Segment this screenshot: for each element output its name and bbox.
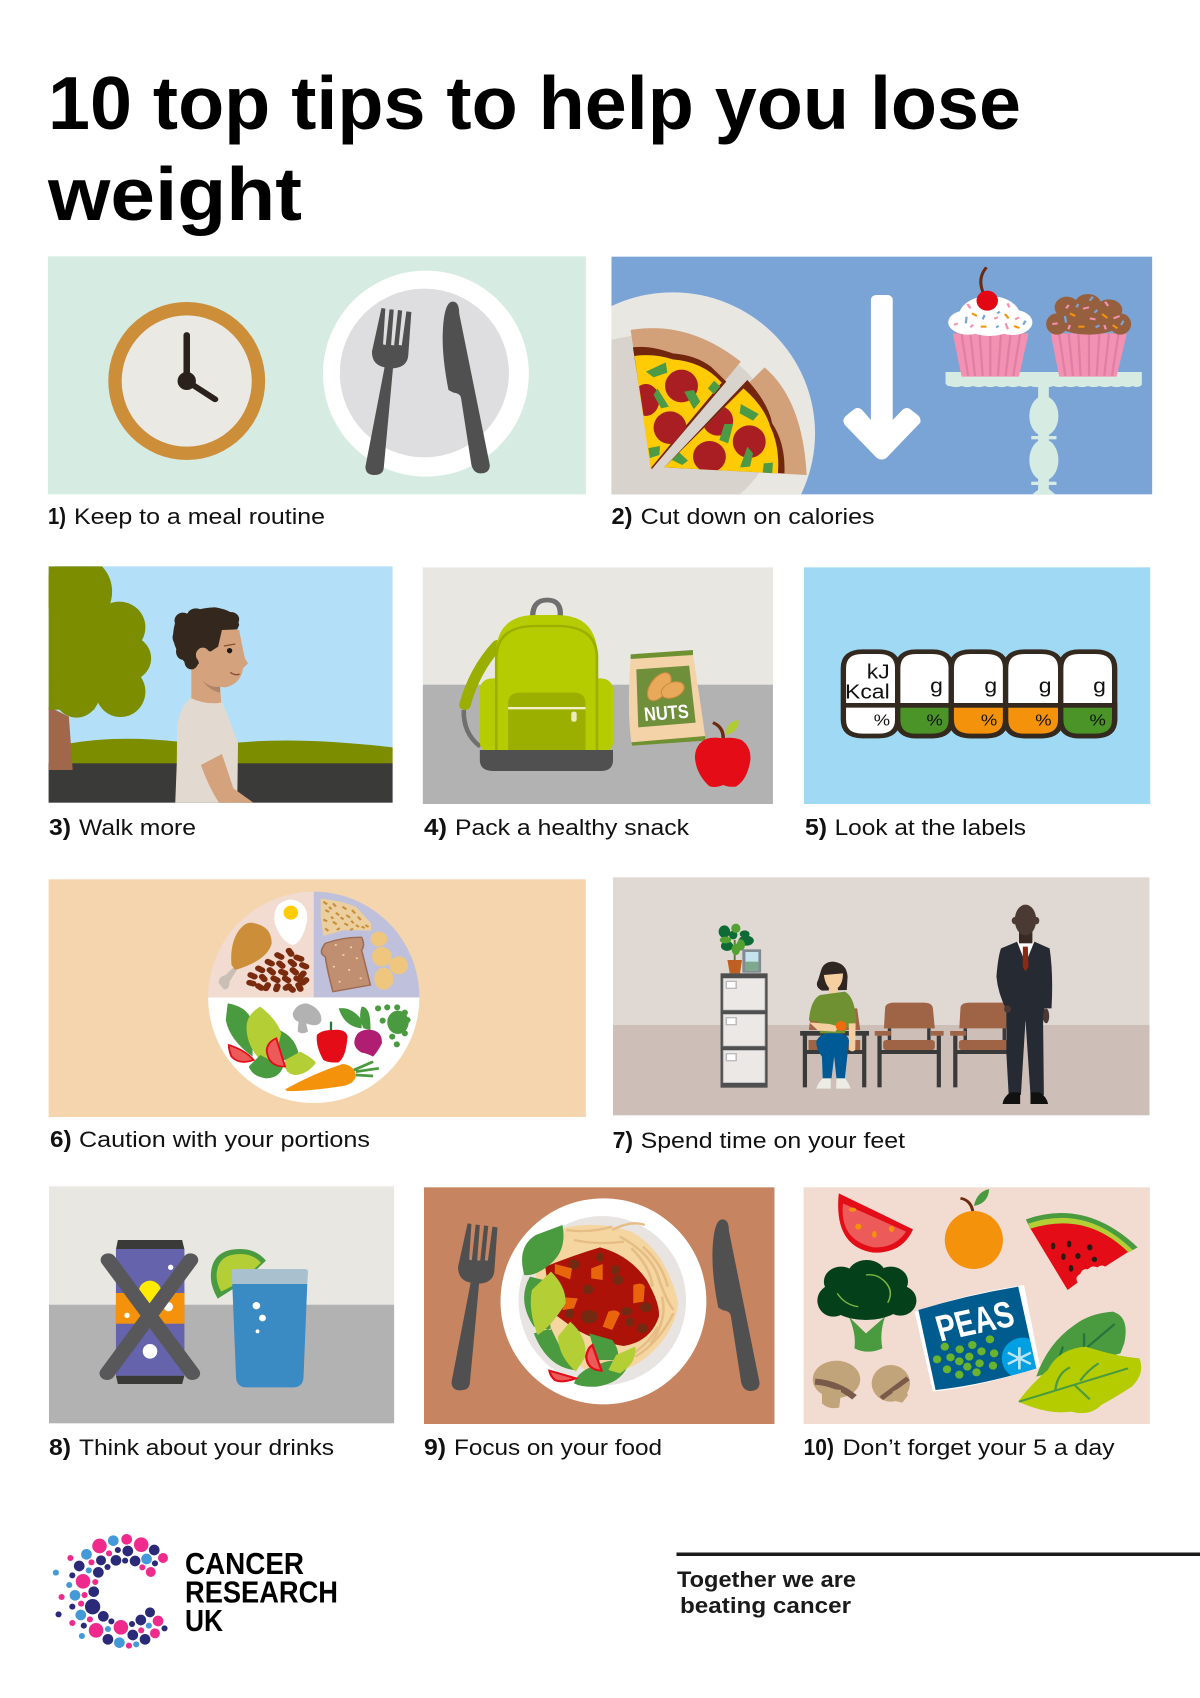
label text: Kcal — [845, 681, 890, 703]
icon: chocolate cupcake — [1046, 294, 1131, 377]
label text: g — [1039, 675, 1052, 697]
title: 10 top tips to help you lose — [48, 61, 1021, 145]
caption 6: 6) — [50, 1126, 72, 1152]
icon: protein foods — [219, 899, 307, 990]
logo mark: dotted C — [53, 1534, 168, 1649]
icon: iced cupcake with cherry — [948, 267, 1032, 377]
caption 10: Don’t forget your 5 a day — [843, 1435, 1115, 1460]
caption 9: Focus on your food — [454, 1435, 662, 1460]
label text: % — [927, 711, 943, 729]
tagline with rule: Together we are — [677, 1567, 856, 1592]
label text: % — [874, 711, 890, 729]
caption 2: Cut down on calories — [641, 504, 875, 529]
chart: plate sections — [208, 892, 419, 1103]
icon: plate with cutlery — [323, 271, 529, 477]
label text: g — [984, 675, 997, 697]
illustration: backpack — [423, 567, 773, 804]
icon: knife — [712, 1219, 760, 1391]
caption 3: 3) — [49, 814, 71, 840]
icon: plate — [501, 1198, 706, 1404]
caption 7: Spend time on your feet — [641, 1128, 905, 1153]
label text: % — [981, 711, 997, 729]
icon: watermelon slice — [1026, 1213, 1138, 1290]
caption 4: 4) — [424, 814, 447, 840]
icon: backpack — [464, 600, 613, 771]
icon: starchy foods — [321, 898, 408, 992]
illustration: waiting room — [613, 877, 1149, 1115]
food: sauce — [545, 1247, 659, 1346]
panel: tip 10 five a day — [804, 1187, 1150, 1460]
icon: frozen peas bag: PEAS — [931, 1294, 1019, 1350]
caption 8: Think about your drinks — [79, 1435, 334, 1460]
illustration: crossed out can and water — [49, 1186, 394, 1423]
figure: standing man in suit — [996, 905, 1052, 1104]
caption 1: 1) — [48, 503, 66, 529]
icon: chair behind man — [950, 1003, 1009, 1087]
icon: plant and picture frame — [719, 924, 761, 973]
logo wordmark: UK — [185, 1603, 224, 1638]
road — [49, 763, 393, 803]
icon: frozen peas bag — [915, 1285, 1044, 1392]
label text: % — [1035, 711, 1052, 729]
hills — [70, 739, 393, 765]
icon: bag of nuts: NUTS — [643, 701, 690, 726]
illustration: plate of spaghetti — [424, 1187, 774, 1424]
nutrition label cells — [843, 652, 1115, 736]
illustration: man walking past a tree — [45, 556, 393, 803]
figure: walking man — [173, 607, 253, 803]
logo: Cancer Research UK — [53, 1534, 338, 1649]
panel: tip 5 labels — [804, 567, 1150, 840]
label text: % — [1090, 711, 1106, 729]
tagline with rule: beating cancer — [680, 1593, 851, 1618]
icon: clock — [108, 302, 265, 460]
caption 2: 2) — [612, 503, 632, 529]
panel: tip 8 drinks — [49, 1186, 394, 1460]
icon: empty chair — [875, 1003, 944, 1087]
icon: vegetables — [226, 1003, 411, 1091]
icon: orange — [945, 1189, 1003, 1269]
tagline with rule — [676, 1552, 1200, 1618]
caption 3: Walk more — [79, 815, 196, 840]
panel: tip 3 walk more — [45, 556, 393, 840]
caption 9: 9) — [424, 1434, 446, 1460]
caption 3 — [49, 814, 196, 840]
panel: tip 2 calories — [612, 256, 1152, 529]
icon: cross — [107, 1260, 192, 1373]
illustration: nutrition label — [804, 567, 1150, 804]
icon: broccoli — [817, 1260, 916, 1352]
caption 7: 7) — [613, 1127, 633, 1153]
caption 5: 5) — [805, 814, 827, 840]
icon: spinach leaves — [1018, 1312, 1141, 1413]
caption 4: Pack a healthy snack — [455, 815, 690, 840]
label text: kJ — [867, 661, 890, 683]
caption 1: Keep to a meal routine — [74, 504, 325, 529]
title — [47, 61, 1021, 236]
icon: lime slice — [211, 1249, 266, 1299]
icon: tree — [45, 556, 151, 770]
illustration: fruit and vegetables — [804, 1187, 1150, 1424]
logo wordmark — [185, 1546, 338, 1638]
caption 8: 8) — [49, 1434, 71, 1460]
logo wordmark: CANCER — [185, 1546, 304, 1581]
icon: fork — [452, 1223, 497, 1390]
icon: tomato wedge — [838, 1193, 913, 1253]
arrow: down — [843, 295, 921, 459]
icon: sugary drink can — [116, 1240, 184, 1384]
illustration: pizza, arrow and cupcakes — [612, 256, 1152, 494]
icon: mushrooms — [813, 1361, 910, 1408]
icon: glass of water — [232, 1269, 308, 1387]
food: salad leaves — [522, 1225, 635, 1387]
panel: tip 9 focus on food — [424, 1187, 774, 1460]
panel: tip 6 portions — [49, 879, 586, 1152]
icon: apple — [695, 720, 750, 787]
icon: chair with seated woman — [800, 962, 869, 1089]
illustration: nuts and apple — [629, 650, 750, 787]
panel: tip 1 meal routine — [48, 256, 586, 529]
caption 6: Caution with your portions — [79, 1127, 370, 1152]
panel: tip 7 time on feet — [613, 877, 1149, 1153]
label text: g — [1093, 675, 1106, 697]
caption 5: Look at the labels — [835, 815, 1026, 840]
panel: tip 4 healthy snack — [423, 567, 773, 840]
icon: filing cabinet — [721, 973, 768, 1088]
icon: cake stand — [946, 372, 1142, 494]
title: weight — [47, 152, 302, 236]
illustration: food plate — [49, 879, 586, 1117]
icon: pizza on plate — [612, 292, 816, 494]
label text — [845, 661, 1106, 729]
food: spaghetti — [536, 1223, 678, 1372]
illustration: clock and plate — [48, 256, 586, 494]
caption 10: 10) — [804, 1434, 834, 1460]
logo wordmark: RESEARCH — [185, 1574, 338, 1610]
label text: g — [930, 675, 943, 697]
